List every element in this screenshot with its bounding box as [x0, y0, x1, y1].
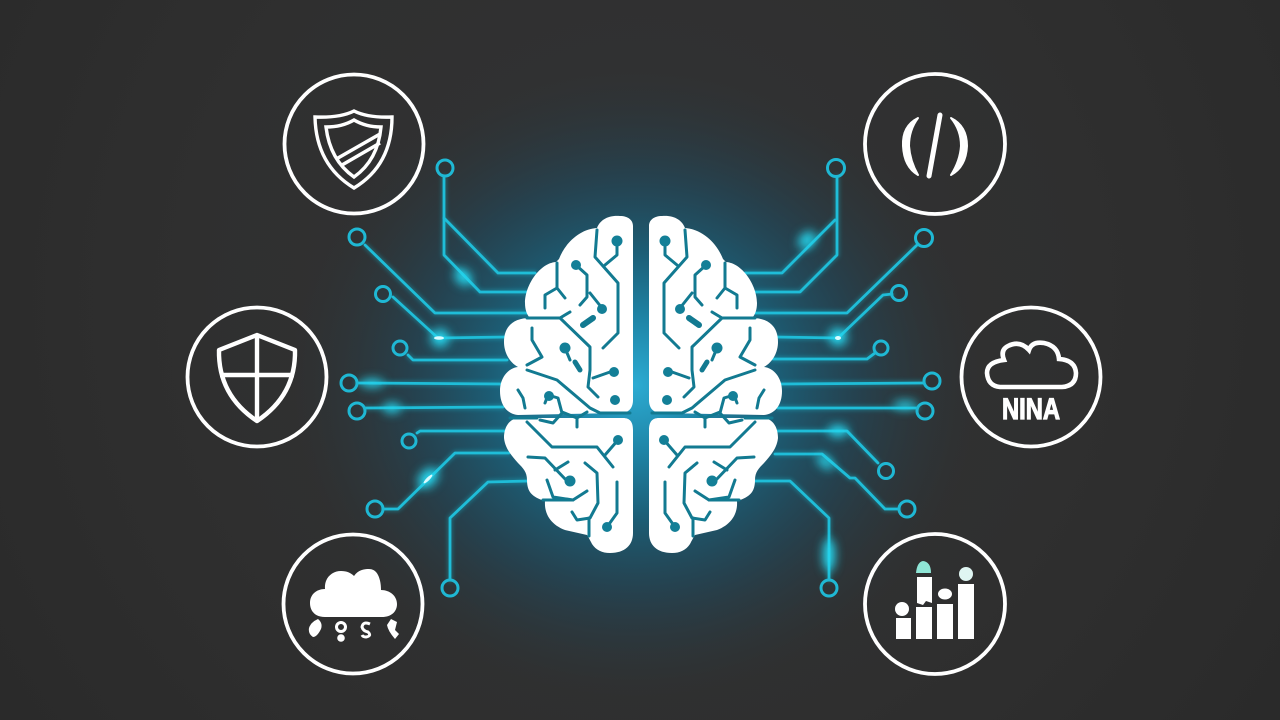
bright trace cores — [423, 336, 841, 484]
trace end nodes — [341, 160, 940, 596]
brain — [500, 216, 782, 553]
icon: code brackets badge — [865, 74, 1005, 214]
circuit traces — [341, 160, 940, 596]
icon: bar chart badge — [865, 534, 1005, 674]
left hemisphere — [500, 216, 633, 553]
glow spots on traces — [360, 228, 917, 572]
central cyan glow — [290, 65, 980, 705]
icon: cross shield badge — [188, 308, 326, 446]
right hemisphere — [649, 216, 782, 553]
icon: raining data cloud badge — [284, 534, 422, 674]
icon: striped shield badge — [284, 74, 424, 214]
icon: cloud with label badge: NINA — [1002, 393, 1060, 426]
icon: cloud with label badge — [962, 308, 1100, 446]
